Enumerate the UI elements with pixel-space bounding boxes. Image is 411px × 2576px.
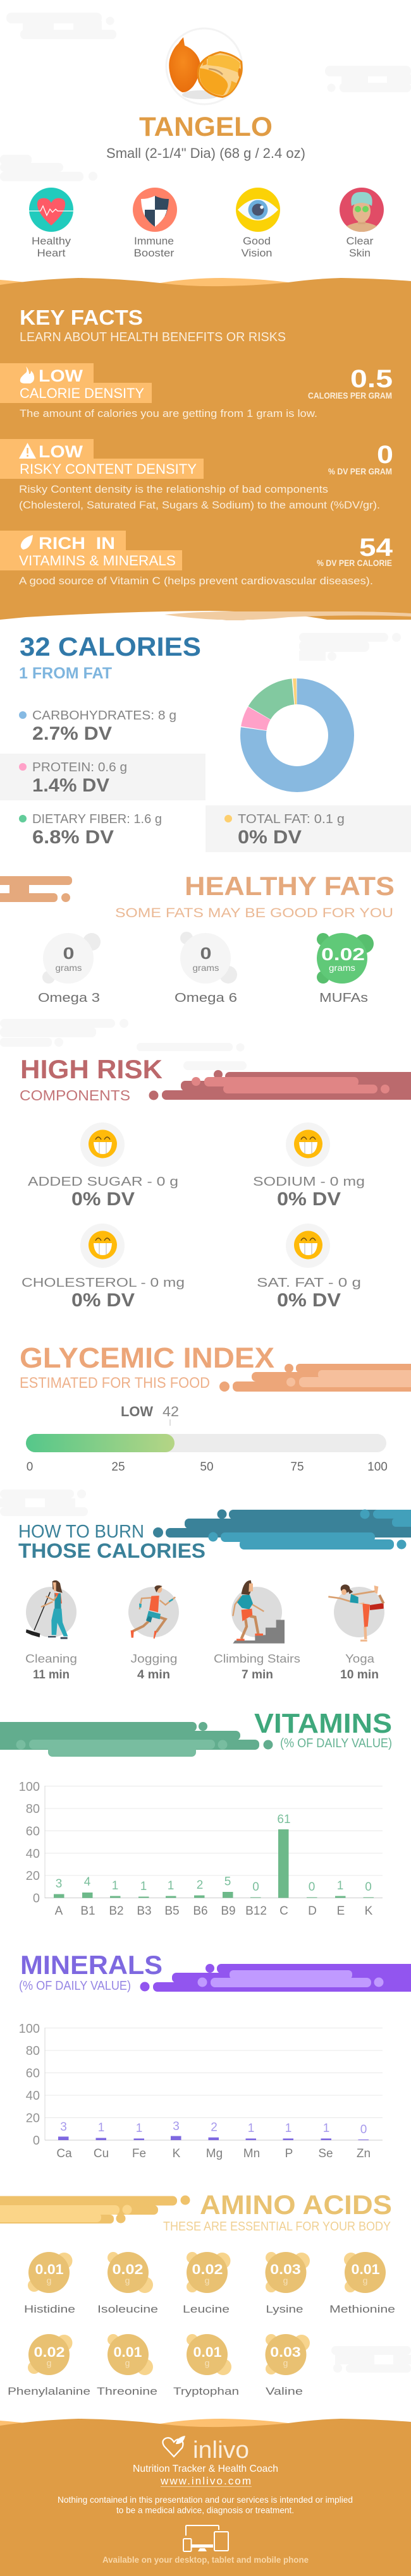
- bar chart: minerals: Ca: [56, 2147, 72, 2160]
- risk item: sodium: SODIUM - 0 mg: [253, 1175, 365, 1189]
- bar chart: minerals: Zn: [357, 2147, 371, 2160]
- bar chart: vitamins: B12: [245, 1905, 267, 1918]
- bubble: omega 3: [38, 933, 101, 1005]
- panel: footer: [0, 2419, 411, 2576]
- amino: valine: [266, 2334, 310, 2397]
- legend: protein: 1.4% DV: [32, 775, 109, 796]
- bar chart: vitamins: 60: [26, 1824, 40, 1838]
- icon: good vision eye: [236, 188, 280, 259]
- legend: total fat: 0% DV: [238, 827, 302, 848]
- amino: tryptophan: [173, 2334, 239, 2397]
- subheading: (% OF DAILY VALUE): [280, 1736, 392, 1750]
- panel: high risk components: [20, 1054, 411, 1311]
- legend: protein: PROTEIN: 0.6 g: [32, 761, 127, 774]
- risk item: added sugar: ADDED SUGAR - 0 g: [28, 1175, 178, 1189]
- amino: leucine: 0.02: [192, 2261, 223, 2277]
- fruit photo: tangelo: [166, 28, 243, 104]
- disclaimer: to be a medical advice, diagnosis or treatment.: [116, 2505, 294, 2515]
- activity: climbing stairs: [214, 1580, 300, 1682]
- bar chart: minerals: Cu: [94, 2147, 109, 2160]
- risk item: added sugar: 0% DV: [71, 1189, 135, 1210]
- bar chart: vitamins: 80: [26, 1802, 40, 1816]
- heading: vitamins: VITAMINS: [254, 1708, 392, 1739]
- bubble: omega 6: [175, 932, 237, 1005]
- bar chart: minerals: 60: [26, 2067, 40, 2081]
- serving size: Small (2-1/4" Dia) (68 g / 2.4 oz): [106, 145, 305, 161]
- bar chart: minerals: 100: [19, 2022, 40, 2036]
- bar chart: vitamins: C: [279, 1905, 288, 1918]
- amino: phenylalanine: [8, 2334, 90, 2397]
- bar chart: minerals: 40: [26, 2089, 40, 2103]
- amino: lysine: 0.03: [270, 2261, 301, 2277]
- fact: low risky content density: 0: [377, 441, 393, 469]
- bar chart: vitamins: B9: [221, 1905, 236, 1918]
- bar chart: vitamins: [19, 1780, 383, 1918]
- bar chart: minerals: 1: [136, 2122, 142, 2135]
- activity: climbing stairs: 7 min: [242, 1668, 273, 1682]
- bubble: omega 3: grams: [56, 963, 82, 973]
- amino: isoleucine: 0.02: [113, 2261, 143, 2277]
- panel: amino acids: [0, 2190, 395, 2397]
- icon: clear skin face mask: [340, 188, 384, 259]
- fact: low calorie density: The amount of calories you are getting from 1 gram is low.: [20, 407, 317, 419]
- amino: isoleucine: g: [125, 2275, 130, 2285]
- amino: methionine: g: [363, 2275, 367, 2285]
- icon: healthy heart: Heart: [37, 247, 66, 259]
- bar chart: vitamins: 1: [168, 1879, 174, 1893]
- fact: low risky content density: (Cholesterol, Saturated Fat, Sugars & Sodium) to the amount (%DV/gr).: [19, 499, 380, 511]
- panel: how to burn those calories: [18, 1510, 411, 1682]
- bar chart: minerals: 1: [323, 2122, 329, 2135]
- icon: clear skin face mask: Skin: [349, 247, 371, 259]
- disclaimer: [58, 2495, 353, 2515]
- subheading: ESTIMATED FOR THIS FOOD: [20, 1375, 210, 1392]
- bar chart: vitamins: K: [365, 1905, 373, 1918]
- disclaimer: Nothing contained in this presentation and our services is intended or implied: [58, 2495, 353, 2505]
- risk item: saturated fat: SAT. FAT - 0 g: [257, 1276, 361, 1290]
- risk item: saturated fat: [257, 1224, 361, 1311]
- bar chart: vitamins: B6: [193, 1905, 208, 1918]
- amino: lysine: [266, 2252, 310, 2315]
- bar chart: minerals: 0: [360, 2123, 367, 2136]
- activity: cleaning: [25, 1580, 77, 1682]
- panel: vitamins: [0, 1708, 392, 1918]
- legend: dietary fiber: 6.8% DV: [32, 827, 114, 848]
- subheading: components: COMPONENTS: [20, 1087, 130, 1104]
- health benefits row: [29, 188, 384, 259]
- bar chart: vitamins: 5: [224, 1875, 231, 1889]
- bar chart: vitamins: 0: [309, 1881, 315, 1894]
- risk item: saturated fat: 0% DV: [277, 1290, 341, 1311]
- website link: www.inlivo.com: [160, 2475, 251, 2487]
- heading: glycemic index: GLYCEMIC INDEX: [20, 1342, 274, 1374]
- scale labels: 0: [27, 1460, 33, 1474]
- activity: climbing stairs: Climbing Stairs: [214, 1652, 300, 1665]
- legend: protein: [0, 754, 206, 800]
- bar chart: vitamins: B2: [109, 1905, 124, 1918]
- scale labels: 50: [200, 1460, 214, 1474]
- bar chart: vitamins: B3: [137, 1905, 152, 1918]
- marker: low 42: 42: [163, 1404, 179, 1419]
- amino: valine: g: [283, 2357, 288, 2368]
- logo: inlivo: [163, 2436, 249, 2464]
- bar chart: minerals: 3: [173, 2120, 180, 2133]
- panel: calories: [0, 632, 411, 852]
- fact: low calorie density: 0.5: [350, 365, 393, 393]
- marker: low 42: LOW: [121, 1404, 153, 1419]
- heading: minerals: MINERALS: [20, 1950, 163, 1980]
- bubble: omega 3: Omega 3: [38, 991, 100, 1005]
- bubble: omega 6: Omega 6: [175, 991, 237, 1005]
- bar chart: minerals: K: [173, 2147, 181, 2160]
- panel: key facts: [0, 306, 393, 587]
- risk item: cholesterol: [21, 1224, 185, 1311]
- bar chart: minerals: 20: [26, 2111, 40, 2125]
- fact: low calorie density: CALORIES PER GRAM: [308, 390, 392, 400]
- bar chart: vitamins: 4: [84, 1875, 91, 1889]
- bar chart: vitamins: 1: [337, 1879, 343, 1893]
- amino: phenylalanine: g: [47, 2357, 51, 2368]
- bar chart: vitamins: A: [55, 1905, 63, 1918]
- bar chart: minerals: 2: [211, 2121, 218, 2134]
- bar chart: minerals: Mg: [206, 2147, 223, 2160]
- icon: good vision eye: Vision: [242, 247, 272, 259]
- bubble: mufas: 0.02: [321, 944, 365, 964]
- amino: methionine: Methionine: [329, 2303, 395, 2315]
- icon: good vision eye: Good: [243, 235, 271, 247]
- risk item: sodium: [253, 1122, 365, 1210]
- bubble: mufas: [317, 933, 374, 1005]
- amino: tryptophan: Tryptophan: [173, 2385, 239, 2397]
- bar chart: vitamins: 1: [112, 1879, 118, 1893]
- bar chart: vitamins: 40: [26, 1847, 40, 1861]
- amino: leucine: g: [205, 2275, 209, 2285]
- activity: yoga: 10 min: [340, 1668, 379, 1682]
- heading: amino acids: AMINO ACIDS: [200, 2190, 392, 2220]
- bar chart: vitamins: 2: [197, 1879, 203, 1892]
- fact: low calorie density: LOW: [39, 366, 83, 385]
- bar chart: vitamins: 20: [26, 1869, 40, 1883]
- bubble: mufas: MUFAs: [319, 991, 368, 1005]
- bar chart: minerals: 1: [248, 2122, 254, 2135]
- amino: isoleucine: Isoleucine: [97, 2303, 158, 2315]
- activity: cleaning: 11 min: [33, 1668, 70, 1682]
- bar chart: vitamins: 0: [252, 1881, 259, 1894]
- fact: low risky content density: Risky Content density is the relationship of bad components: [19, 483, 328, 495]
- bar chart: minerals: 3: [60, 2121, 67, 2134]
- bar chart: minerals: 0: [33, 2134, 40, 2148]
- bar chart: vitamins: 0: [33, 1891, 40, 1905]
- bar chart: minerals: Fe: [132, 2147, 146, 2160]
- amino: lysine: g: [283, 2275, 288, 2285]
- scale labels: [27, 1460, 388, 1474]
- bar chart: minerals: Mn: [243, 2147, 260, 2160]
- fact: low risky content density: LOW: [39, 442, 83, 461]
- amino: valine: Valine: [266, 2385, 303, 2397]
- icon: devices: [183, 2525, 228, 2551]
- icon: clear skin face mask: Clear: [347, 235, 374, 247]
- legend: dietary fiber: [19, 812, 162, 848]
- tagline: Nutrition Tracker & Health Coach: [133, 2464, 278, 2474]
- heading: how to burn: HOW TO BURN: [18, 1522, 144, 1542]
- bar chart: vitamins: D: [308, 1905, 317, 1918]
- panel: healthy fats: [0, 871, 395, 1005]
- legend: dietary fiber: DIETARY FIBER: 1.6 g: [32, 812, 162, 826]
- amino: leucine: Leucine: [183, 2303, 230, 2315]
- bar chart: vitamins: 3: [56, 1877, 62, 1891]
- activity: yoga: Yoga: [345, 1652, 375, 1665]
- bar chart: vitamins: B5: [164, 1905, 180, 1918]
- amino: histidine: 0.01: [35, 2261, 63, 2277]
- subheading: SOME FATS MAY BE GOOD FOR YOU: [115, 906, 393, 920]
- bar chart: minerals: 80: [26, 2044, 40, 2058]
- bar chart: vitamins: 61: [277, 1813, 291, 1826]
- amino: threonine: g: [125, 2357, 130, 2368]
- scale labels: 75: [290, 1460, 304, 1474]
- amino: threonine: [97, 2334, 157, 2397]
- scale labels: 100: [367, 1460, 388, 1474]
- amino: tryptophan: g: [205, 2357, 209, 2368]
- amino: histidine: g: [47, 2275, 51, 2285]
- legend: carbohydrates: 2.7% DV: [32, 723, 112, 744]
- subheading: LEARN ABOUT HEALTH BENEFITS OR RISKS: [20, 330, 286, 344]
- fact: rich in vitamins and minerals: A good source of Vitamin C (helps prevent cardiovascular diseases).: [19, 575, 373, 587]
- bar chart: vitamins: E: [337, 1905, 345, 1918]
- bar chart: vitamins: 0: [365, 1881, 372, 1894]
- heading: healthy fats: HEALTHY FATS: [185, 871, 395, 901]
- risk item: cholesterol: CHOLESTEROL - 0 mg: [21, 1276, 185, 1290]
- bar chart: vitamins: 100: [19, 1780, 40, 1794]
- subheading: THESE ARE ESSENTIAL FOR YOUR BODY: [163, 2220, 391, 2234]
- risk item: sodium: 0% DV: [277, 1189, 341, 1210]
- fact: rich in vitamins and minerals: 54: [359, 534, 393, 562]
- fact: rich in vitamins and minerals: % DV PER CALORIE: [317, 558, 392, 568]
- bubble: mufas: grams: [329, 963, 355, 973]
- icon: immune booster shield: Booster: [134, 247, 175, 259]
- icon: healthy heart: [29, 188, 73, 259]
- bar chart: minerals: Se: [318, 2147, 333, 2160]
- activity: cleaning: Cleaning: [25, 1652, 77, 1665]
- glycemic bar: [26, 1434, 386, 1452]
- amino: methionine: [329, 2252, 395, 2315]
- bar chart: minerals: [19, 2022, 383, 2160]
- heading: those calories: THOSE CALORIES: [18, 1539, 206, 1562]
- fact: rich in vitamins and minerals: VITAMINS & MINERALS: [19, 553, 176, 569]
- amino: valine: 0.03: [270, 2344, 301, 2360]
- fact: low risky content density: RISKY CONTENT DENSITY: [20, 461, 197, 477]
- activity: jogging: 4 min: [137, 1668, 170, 1682]
- risk item: cholesterol: 0% DV: [71, 1290, 135, 1311]
- bubble: omega 3: 0: [63, 944, 75, 963]
- bar chart: minerals: 1: [98, 2121, 104, 2134]
- icon: healthy heart: Healthy: [32, 235, 71, 247]
- amino: phenylalanine: 0.02: [34, 2344, 64, 2360]
- bubble: omega 6: grams: [192, 963, 219, 973]
- amino: histidine: Histidine: [24, 2303, 75, 2315]
- icon: immune booster shield: Immune: [134, 235, 174, 247]
- heading: high risk: HIGH RISK: [20, 1054, 163, 1084]
- fact: low risky content density: [0, 439, 393, 511]
- amino: histidine: [24, 2252, 75, 2315]
- heading: key facts: KEY FACTS: [20, 306, 143, 329]
- legend: total fat: TOTAL FAT: 0.1 g: [238, 812, 345, 826]
- title: TANGELO: [139, 112, 273, 142]
- amino: phenylalanine: Phenylalanine: [8, 2385, 90, 2397]
- amino: threonine: Threonine: [97, 2385, 157, 2397]
- bar chart: vitamins: 1: [140, 1880, 147, 1893]
- legend: carbohydrates: [19, 709, 176, 744]
- subheading: (% OF DAILY VALUE): [19, 1979, 131, 1993]
- legend: total fat: [206, 805, 411, 852]
- fact: rich in vitamins and minerals: RICH IN: [39, 534, 115, 553]
- panel: minerals: [19, 1950, 411, 2160]
- marker: low 42: [121, 1404, 179, 1426]
- fact: rich in vitamins and minerals: [0, 531, 393, 587]
- amino: isoleucine: [97, 2252, 158, 2315]
- panel: glycemic index: [20, 1342, 411, 1474]
- amino: lysine: Lysine: [266, 2303, 304, 2315]
- subheading: from fat: 1 FROM FAT: [19, 665, 112, 682]
- amino: threonine: 0.01: [114, 2344, 142, 2360]
- amino: methionine: 0.01: [352, 2261, 379, 2277]
- scale labels: 25: [111, 1460, 125, 1474]
- bubble: omega 6: 0: [200, 944, 211, 963]
- bar chart: minerals: 1: [285, 2122, 291, 2135]
- donut chart: [253, 691, 341, 779]
- activity: yoga: [328, 1584, 384, 1682]
- activity: jogging: [128, 1586, 179, 1682]
- legend: carbohydrates: CARBOHYDRATES: 8 g: [32, 709, 176, 723]
- amino: leucine: [183, 2252, 230, 2315]
- fact: low calorie density: [0, 363, 393, 419]
- logo: inlivo: inlivo: [193, 2437, 249, 2464]
- fact: low calorie density: CALORIE DENSITY: [20, 385, 144, 401]
- amino: tryptophan: 0.01: [193, 2344, 221, 2360]
- risk item: added sugar: [28, 1122, 178, 1210]
- availability note: Available on your desktop, tablet and mobile phone: [102, 2555, 309, 2565]
- activity: jogging: Jogging: [130, 1652, 177, 1665]
- heading: calories: 32 CALORIES: [20, 632, 201, 661]
- bar chart: minerals: P: [285, 2147, 293, 2160]
- icon: immune booster shield: [133, 188, 177, 259]
- bar chart: vitamins: B1: [80, 1905, 95, 1918]
- fact: low risky content density: % DV PER GRAM: [328, 466, 392, 476]
